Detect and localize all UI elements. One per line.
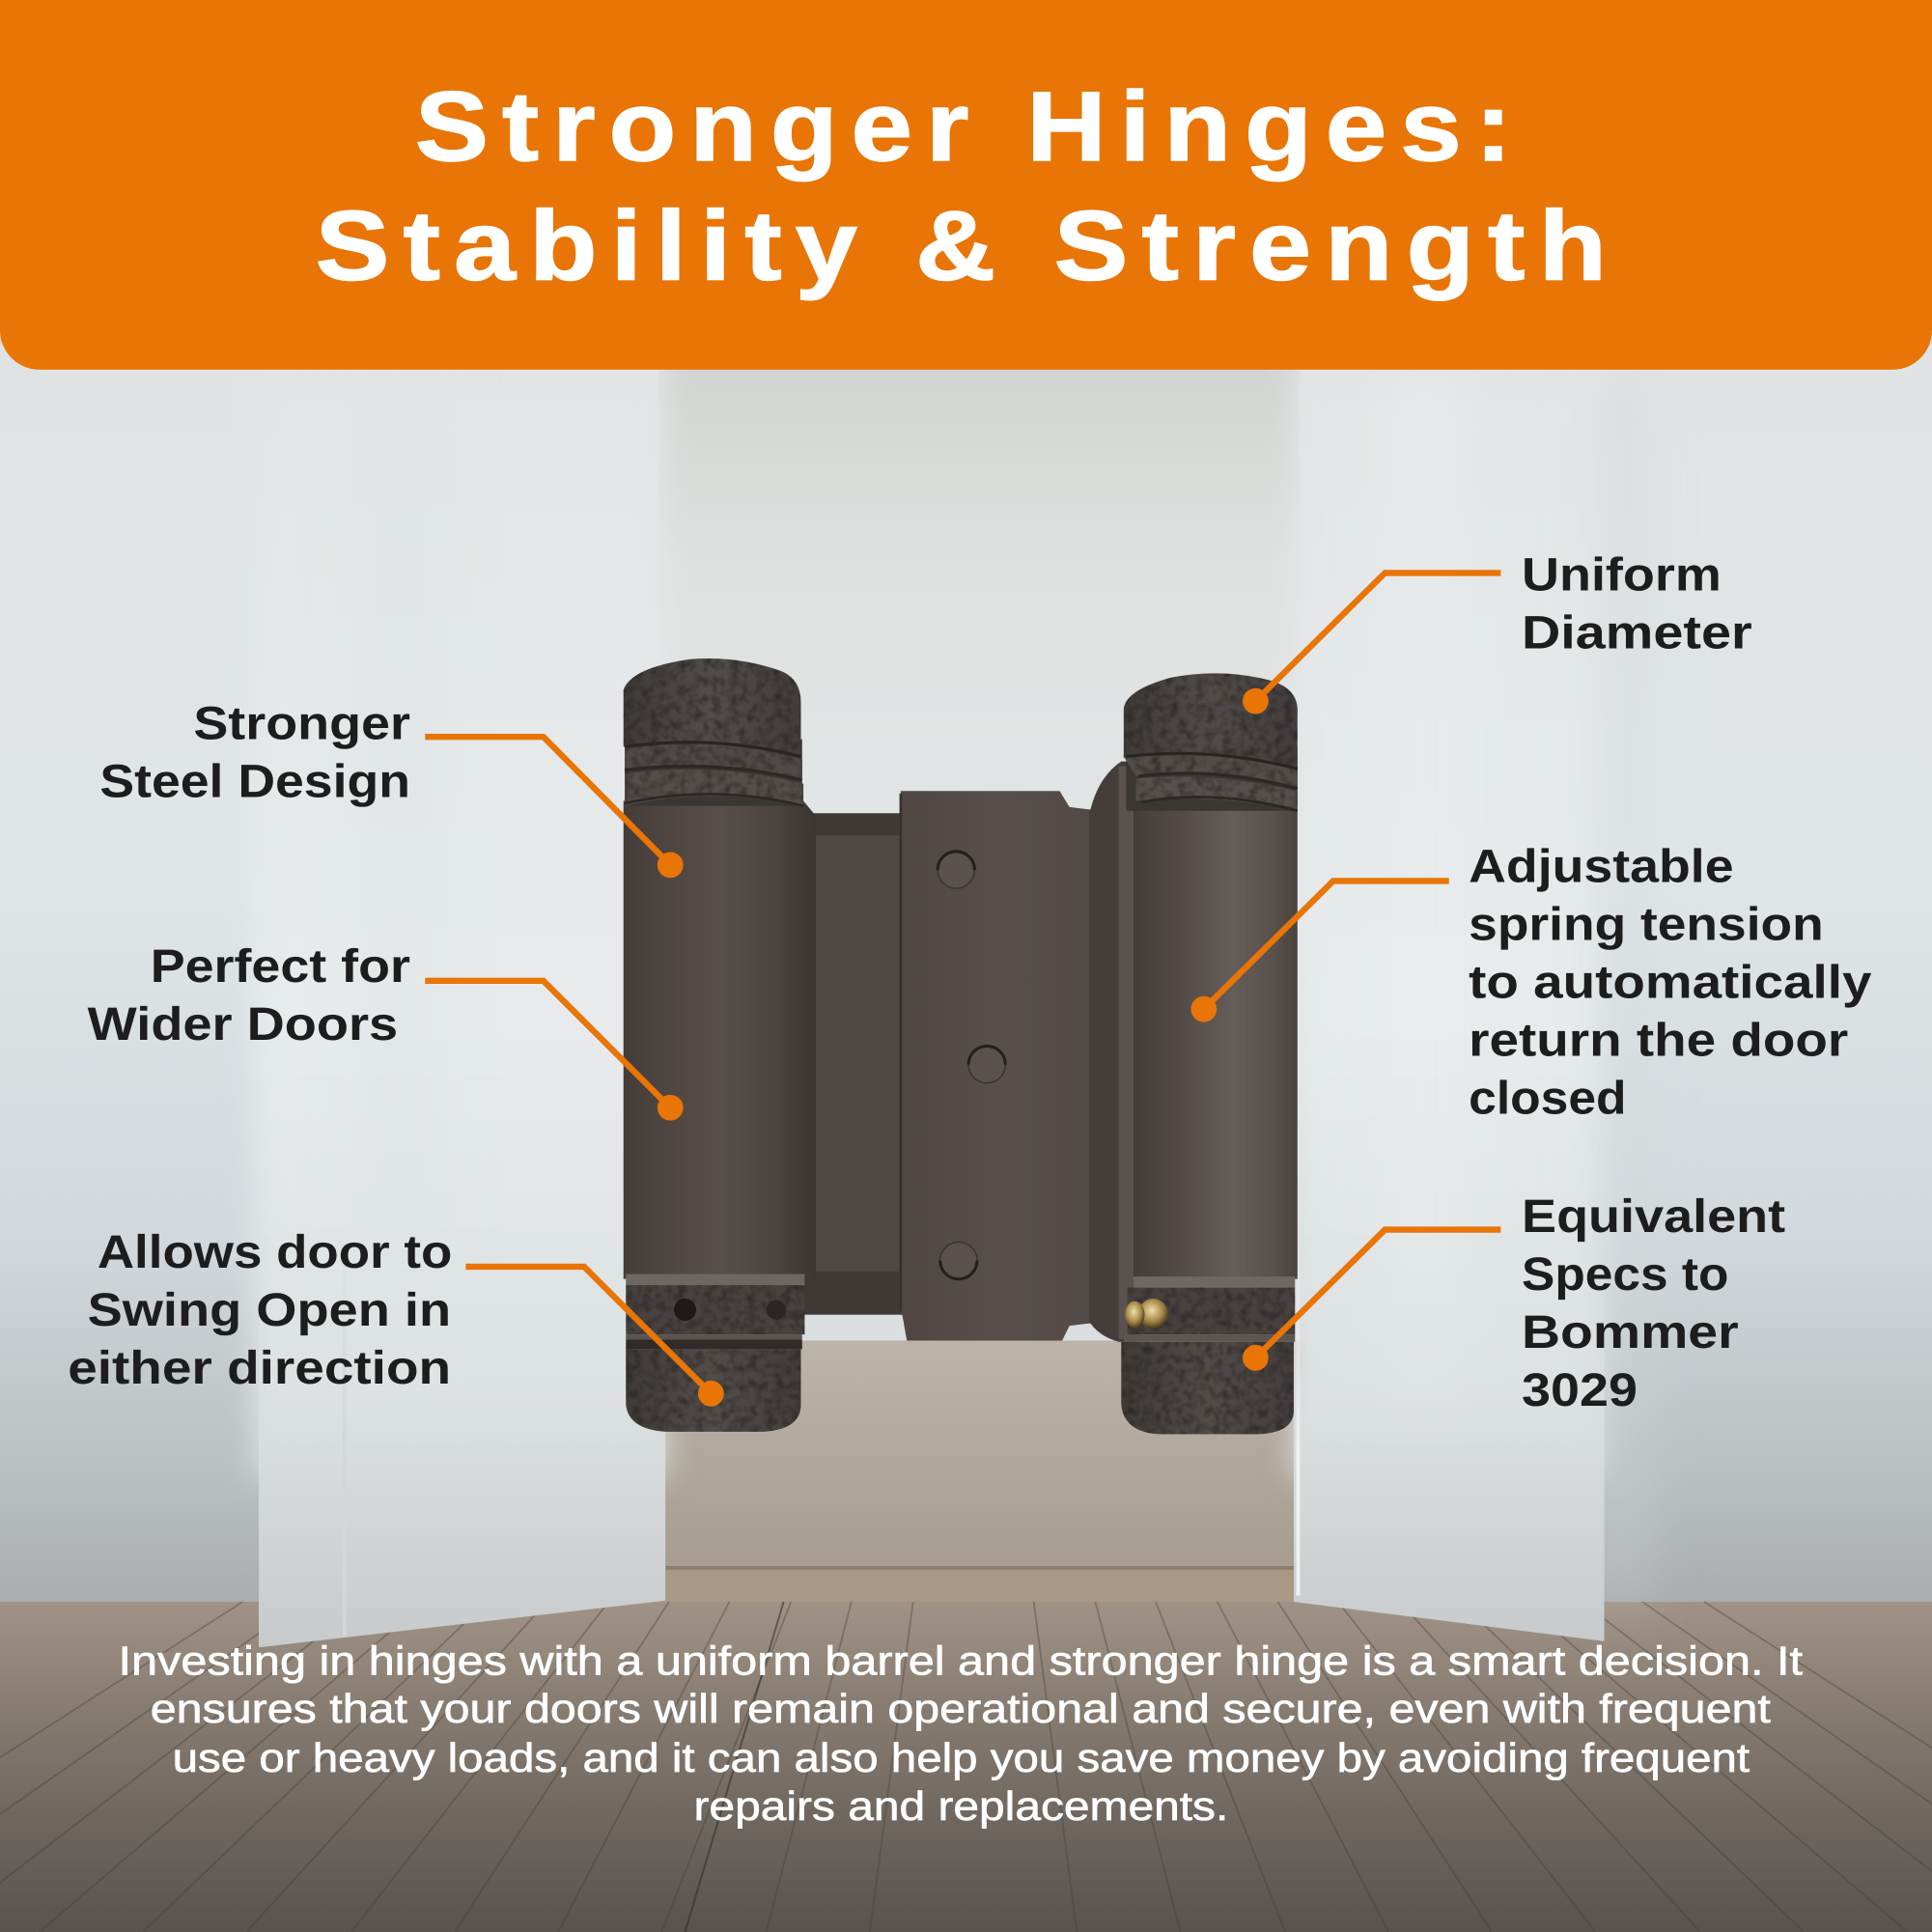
closing paragraph: ensures that your doors will remain operational and secure, even with frequent [151,1686,1771,1731]
hinge left barrel [624,658,816,1432]
callout: Allows door to swing: Allows door to [98,1227,452,1279]
callout: Allows door to swing: Swing Open in [88,1285,451,1337]
callout: Stronger Steel Design: Stronger [193,699,410,750]
callout: Adjustable spring tension [1190,842,1871,1125]
closing paragraph: repairs and replacements. [693,1783,1228,1829]
brass adjustment screw [1125,1299,1168,1329]
callout: Uniform Diameter: Diameter [1522,607,1752,659]
callout: Equivalent Specs [1243,1191,1786,1417]
callout: Uniform Diameter [1243,549,1752,714]
callout: Adjustable spring tension: spring tension [1469,900,1824,951]
callout: Perfect for Wider Doors: Wider Doors [88,999,398,1051]
callout: Equivalent Specs: Bommer [1522,1307,1739,1359]
hinge bridge between barrels [803,813,905,1315]
title: Stability & Strength [316,191,1620,300]
header banner [0,0,1932,370]
callout: Equivalent Specs: Specs to [1522,1249,1728,1302]
callout: Adjustable spring tension: Adjustable [1469,842,1734,893]
closing paragraph [119,1638,1803,1829]
callout: Stronger Steel Design: Steel Design [99,757,410,808]
callout: Adjustable spring tension: to automatically [1469,958,1871,1009]
hinge product image [624,658,1298,1434]
callout: Equivalent Specs: 3029 [1522,1365,1638,1417]
callout: Uniform Diameter: Uniform [1522,549,1722,602]
hinge center plate [900,791,1089,1340]
callout: Adjustable spring tension: return the door [1469,1016,1849,1067]
callout: Adjustable spring tension: closed [1469,1074,1627,1125]
hinge right bracket [1084,762,1136,1342]
title: Stronger Hinges: [415,71,1526,182]
hinge right barrel [1121,673,1298,1434]
callout: Perfect for Wider Doors: Perfect for [151,941,410,994]
callout: Allows door to swing [68,1227,724,1407]
title [316,71,1620,300]
closing paragraph: use or heavy loads, and it can also help you save money by avoiding frequent [173,1735,1750,1780]
callout: Stronger Steel Design [99,699,684,878]
callout: Perfect for Wider Doors [88,941,684,1121]
callout: Equivalent Specs: Equivalent [1522,1191,1786,1244]
closing paragraph: Investing in hinges with a uniform barrel and stronger hinge is a smart decision. It [119,1638,1803,1683]
callout: Allows door to swing: either direction [68,1343,451,1395]
